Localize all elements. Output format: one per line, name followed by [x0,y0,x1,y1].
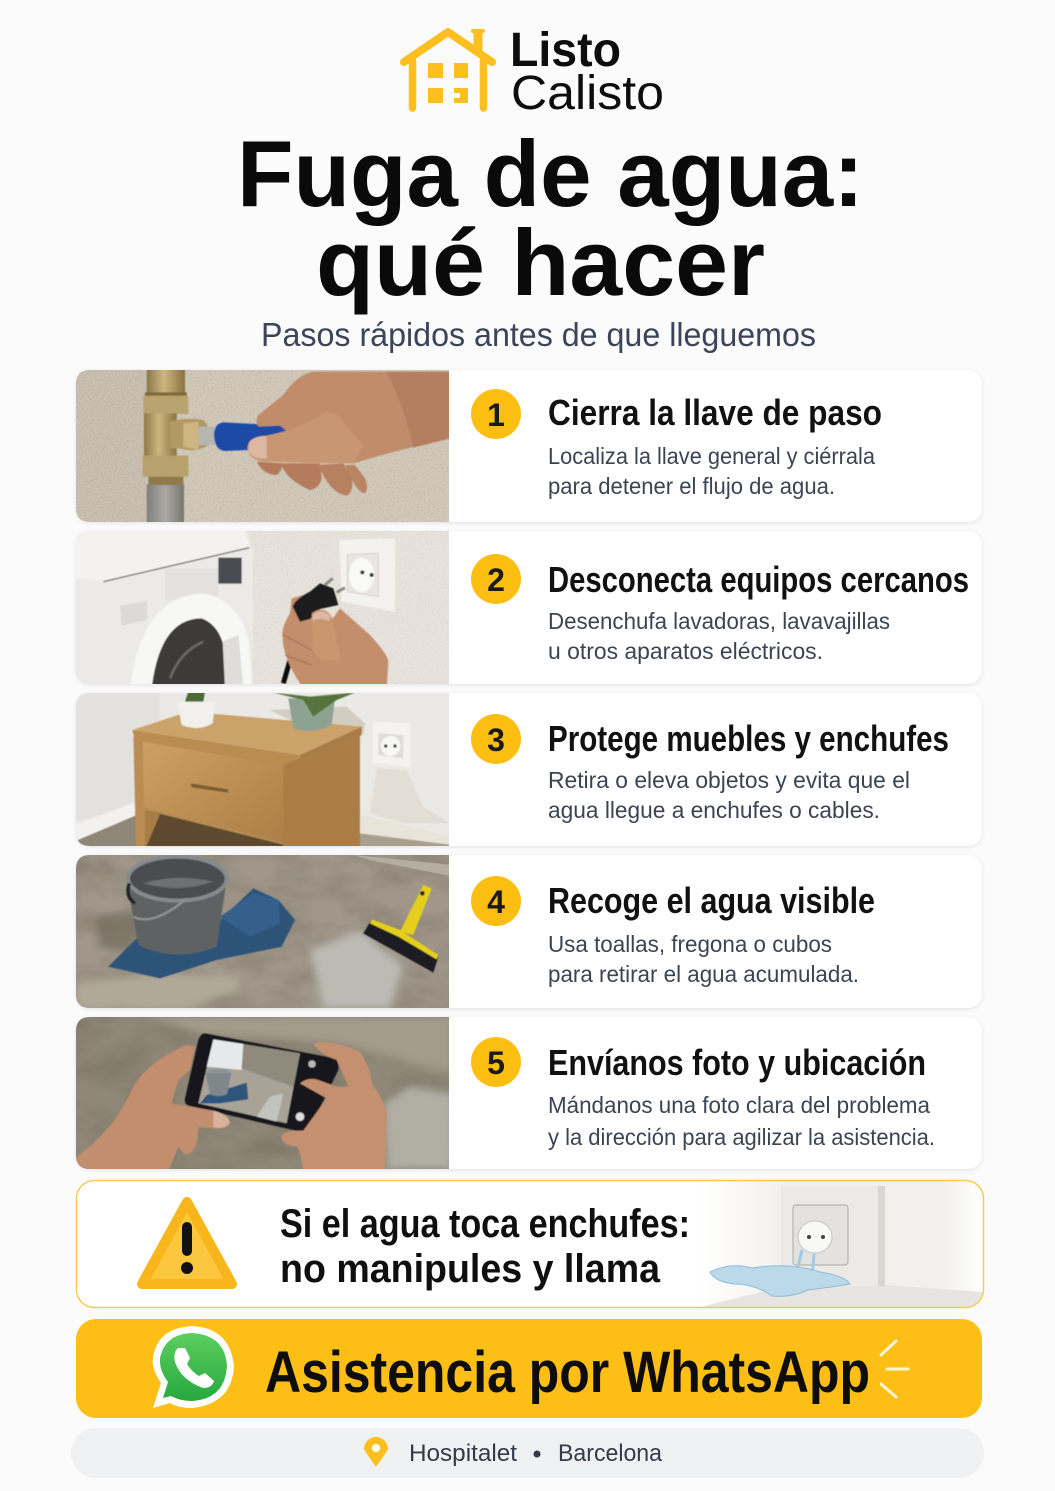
step number 3: 3 [487,722,505,758]
panel: step 4 [76,855,982,1008]
icon: yellow house [404,31,492,108]
step 3 heading: Protege muebles y enchufes [548,718,949,759]
card background [76,531,982,684]
subtitle: Pasos rápidos antes de que lleguemos [261,316,816,353]
step number 5 [471,1037,521,1087]
step number 1 [471,389,521,439]
button label: Asistencia por WhatsApp [265,1340,870,1405]
title: Fuga de agua: [237,121,864,226]
icon: location pin [364,1437,388,1467]
step 1 description: para detener el flujo de agua. [548,473,835,499]
step 1 description: Localiza la llave general y ciérrala [548,443,875,469]
card background [76,370,982,522]
step 5 heading: Envíanos foto y ubicación [548,1042,926,1083]
step 1 heading: Cierra la llave de paso [548,392,882,433]
step 2 description [548,608,890,664]
warning box border [76,1180,984,1308]
warning box [76,1180,984,1308]
footer pill [71,1428,984,1478]
step 4 description: para retirar el agua acumulada. [548,961,859,987]
footer: location [71,1428,984,1478]
step number 3 [471,714,521,764]
card background [76,855,982,1008]
step 5 description: y la dirección para agilizar la asistencia. [548,1124,935,1150]
step number 2: 2 [487,562,505,598]
step number 5: 5 [487,1045,505,1081]
step number 4 [471,876,521,926]
card background [76,1017,982,1169]
warning text [280,1202,690,1291]
warning text: Si el agua toca enchufes: [280,1202,690,1246]
step 3 description: agua llegue a enchufes o cables. [548,797,880,823]
photo: hand closing valve [76,368,450,523]
location text [409,1440,663,1467]
logo word: Calisto: Calisto [511,67,664,120]
step 4 description: Usa toallas, fregona o cubos [548,931,832,957]
callout: warning about sockets [76,1180,984,1308]
panel: step 2 [70,528,982,688]
location text: Barcelona [558,1440,663,1467]
title [237,121,864,315]
card background [76,693,982,846]
panel: step 3 [70,690,982,850]
step number 1: 1 [487,397,505,433]
step 4 description [548,931,859,987]
panel: step 5 [76,1017,982,1170]
photo: bucket, towel and squeegee [76,855,453,1008]
icon: warning triangle [142,1202,232,1284]
photo: wooden cabinet and socket [70,690,453,850]
step 3 description [548,767,910,823]
illustration: wet socket [700,1181,983,1307]
logo word: Listo: Listo [510,24,621,77]
step 5 description [548,1092,935,1150]
step 2 heading: Desconecta equipos cercanos [548,559,969,600]
button background [76,1319,982,1418]
icon: WhatsApp logo [153,1326,234,1408]
step number 2 [471,554,521,604]
icon: sparkle rays [881,1341,908,1397]
photo: phone taking picture of leak [76,1017,453,1170]
location text: Hospitalet [409,1440,517,1467]
logo: Listo Calisto [404,24,664,120]
panel: step 1 [76,368,982,523]
step 5 description: Mándanos una foto clara del problema [548,1092,930,1118]
title: qué hacer [316,210,765,315]
step 3 description: Retira o eleva objetos y evita que el [548,767,910,793]
photo: unplugging appliance [70,528,449,688]
step 4 heading: Recoge el agua visible [548,880,875,921]
warning text: no manipules y llama [280,1247,661,1291]
step 2 description: u otros aparatos eléctricos. [548,638,823,664]
button: WhatsApp assistance [76,1319,982,1418]
step 2 description: Desenchufa lavadoras, lavavajillas [548,608,890,634]
step number 4: 4 [487,884,505,920]
step 1 description [548,443,875,499]
